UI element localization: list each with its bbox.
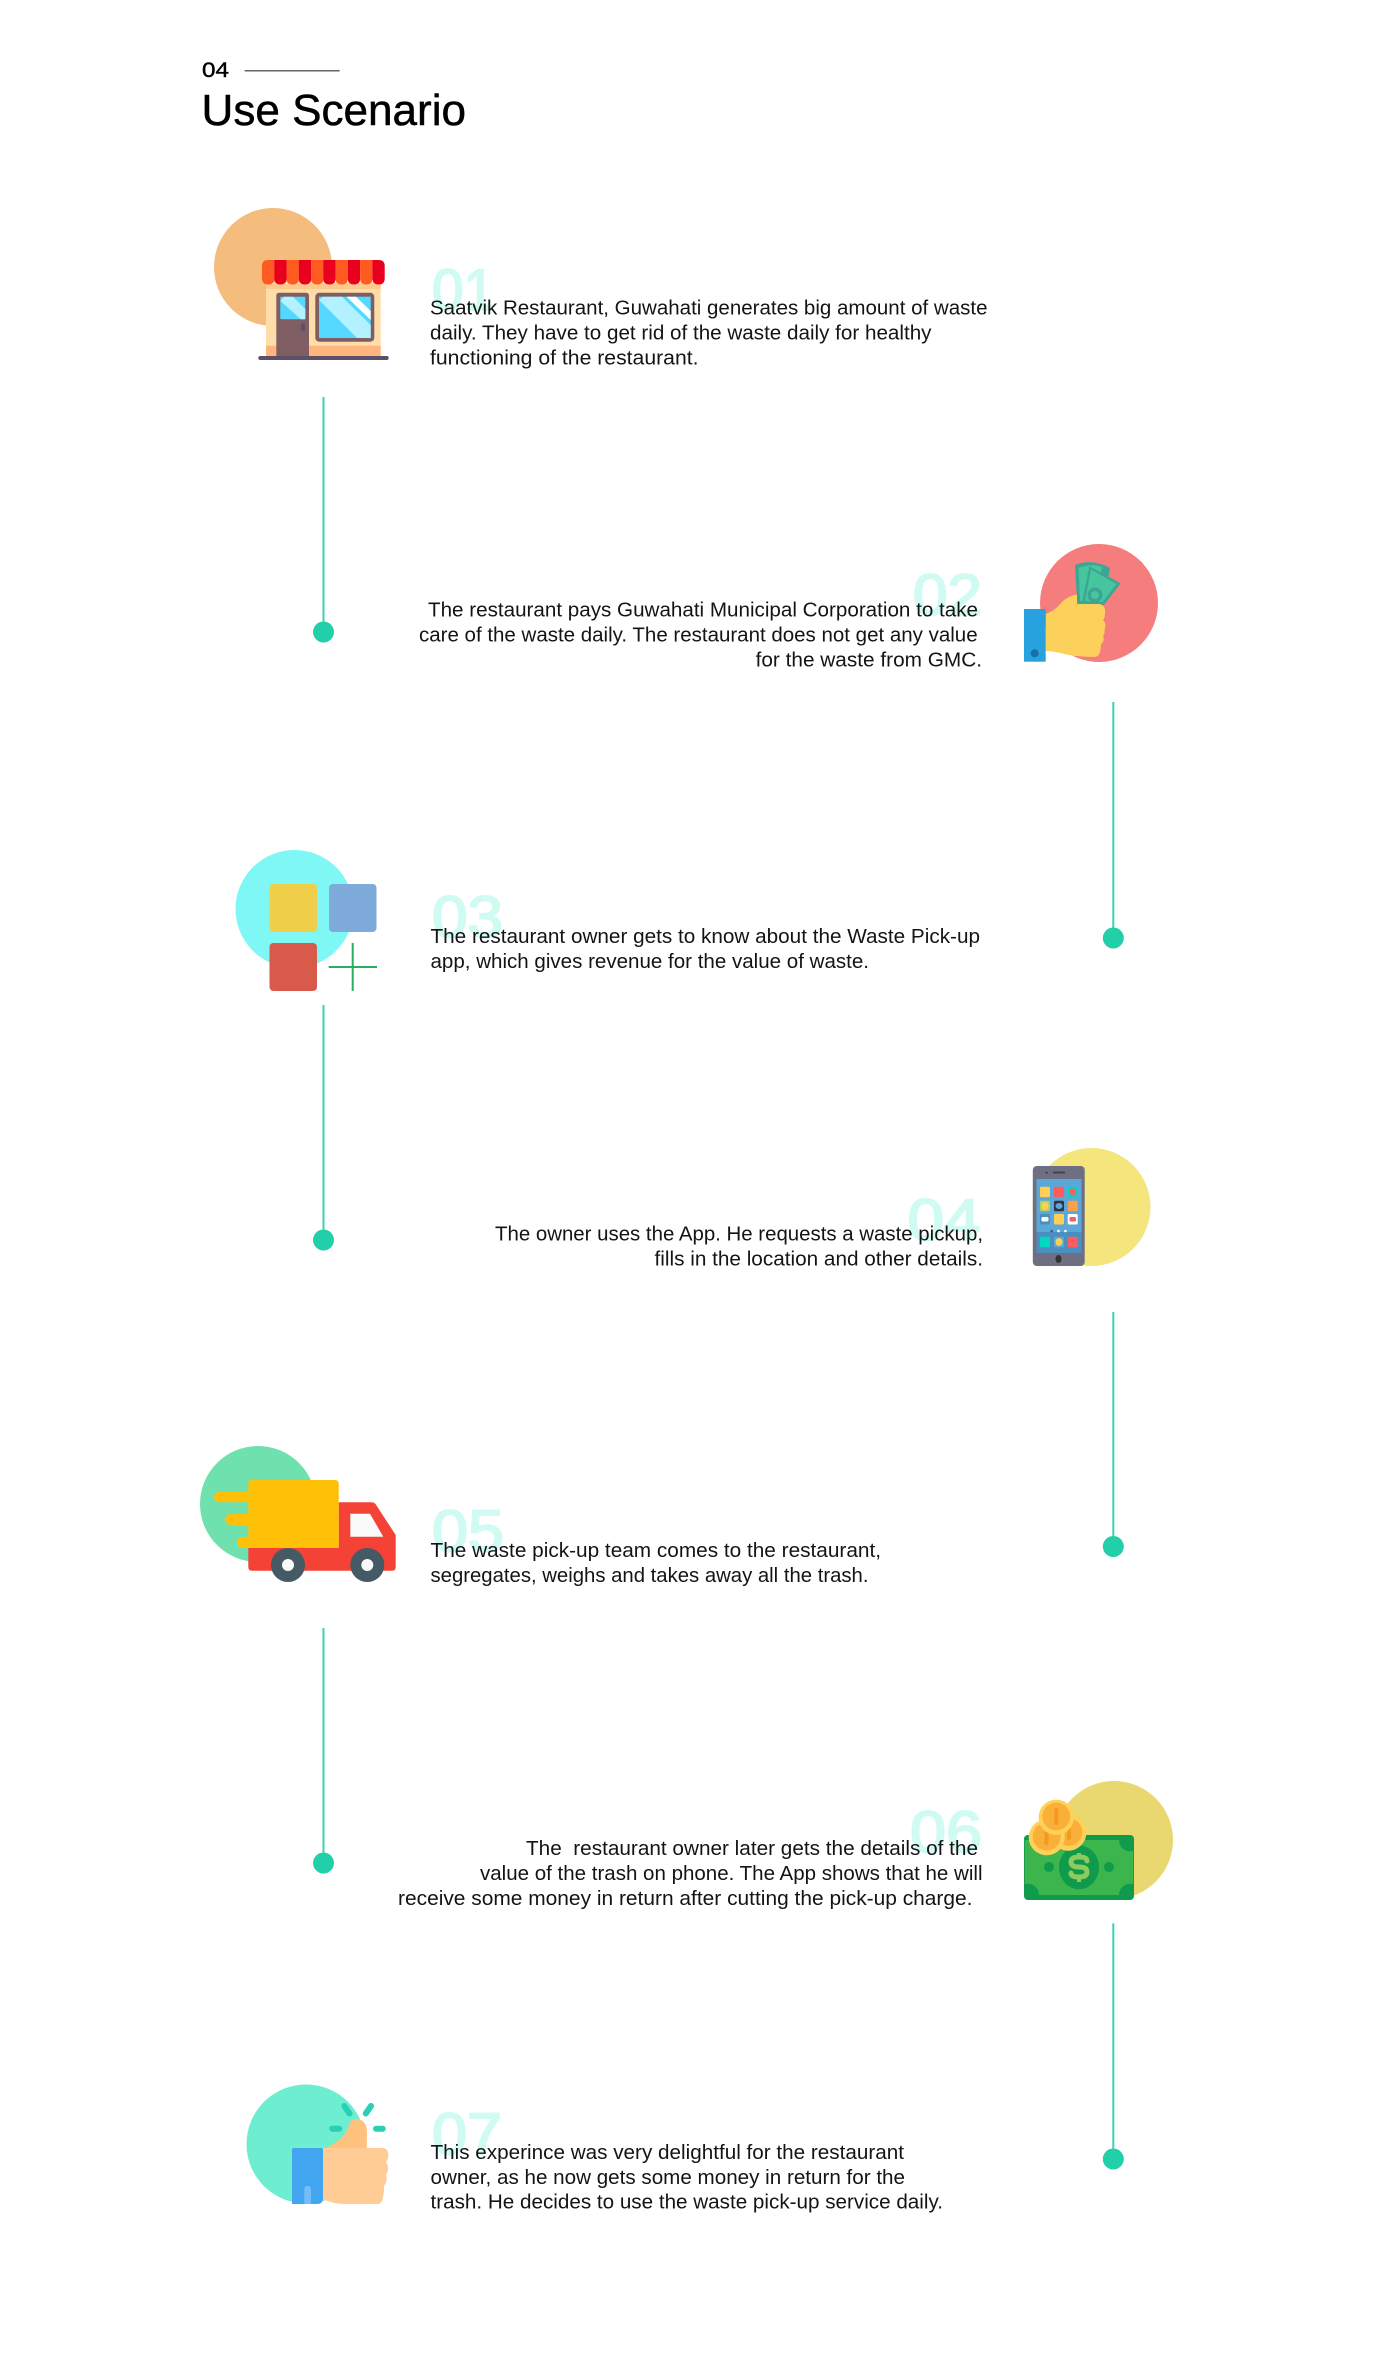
description 6: The restaurant owner later gets the details of the xyxy=(526,1838,978,1860)
icon: smartphone xyxy=(1032,1148,1150,1266)
section number: 04 xyxy=(202,59,229,82)
step number 06: 06 xyxy=(910,1800,982,1865)
description 1: daily. They have to get rid of the waste daily for healthy xyxy=(430,322,932,344)
description 6: value of the trash on phone. The App shows that he will xyxy=(480,1863,982,1885)
description 7: owner, as he now gets some money in return for the xyxy=(430,2167,905,2189)
icon: delivery truck xyxy=(200,1446,396,1582)
description 2: for the waste from GMC. xyxy=(756,650,982,672)
description 5: The waste pick-up team comes to the restaurant, xyxy=(430,1540,881,1562)
description 5: segregates, weighs and takes away all the trash. xyxy=(430,1565,868,1587)
step number 03: 03 xyxy=(432,885,503,950)
step 2 xyxy=(419,544,1158,948)
step 3 xyxy=(236,850,980,1250)
connector 5 xyxy=(313,1628,334,1874)
description 6: receive some money in return after cutting the pick-up charge. xyxy=(398,1888,972,1910)
step 7 xyxy=(246,2084,943,2214)
icon: restaurant storefront xyxy=(214,208,389,360)
step number 04: 04 xyxy=(908,1188,980,1253)
description 6 xyxy=(398,1838,982,1910)
step 4 xyxy=(495,1148,1150,1557)
description 2: care of the waste daily. The restaurant does not get any value xyxy=(419,624,978,646)
step 6 xyxy=(398,1781,1173,2170)
description 1: functioning of the restaurant. xyxy=(430,348,698,370)
icon: app tiles xyxy=(236,850,377,991)
connector 6 xyxy=(1103,1923,1124,2170)
step number 02: 02 xyxy=(913,563,982,628)
description 7: This experince was very delightful for the restaurant xyxy=(430,2142,904,2164)
description 3: The restaurant owner gets to know about the Waste Pick-up xyxy=(430,926,980,948)
header xyxy=(202,59,466,135)
description 7: trash. He decides to use the waste pick-up service daily. xyxy=(430,2192,943,2214)
step 5 xyxy=(200,1446,881,1874)
description 1 xyxy=(430,298,988,370)
description 2 xyxy=(419,600,982,672)
step number 07: 07 xyxy=(432,2102,502,2167)
connector 3 xyxy=(313,1005,334,1250)
description 4: fills in the location and other details. xyxy=(654,1248,983,1270)
description 1: Saatvik Restaurant, Guwahati generates big amount of waste xyxy=(430,298,988,320)
title: Use Scenario xyxy=(202,86,466,135)
description 2: The restaurant pays Guwahati Municipal Corporation to take xyxy=(428,600,978,622)
icon: banknote and coins xyxy=(1024,1781,1173,1900)
step 1 xyxy=(214,208,988,642)
description 4 xyxy=(495,1224,983,1270)
icon: thumbs up xyxy=(246,2084,388,2204)
description 5 xyxy=(430,1540,881,1587)
step number 01: 01 xyxy=(432,258,495,323)
description 7 xyxy=(430,2142,943,2214)
icon: hand holding money xyxy=(1024,544,1158,662)
description 4: The owner uses the App. He requests a waste pickup, xyxy=(495,1224,983,1246)
description 3: app, which gives revenue for the value of waste. xyxy=(430,951,869,973)
description 3 xyxy=(430,926,980,973)
connector 2 xyxy=(1103,702,1124,948)
connector 1 xyxy=(313,397,334,642)
step number 05: 05 xyxy=(432,1499,504,1564)
connector 4 xyxy=(1103,1312,1124,1557)
